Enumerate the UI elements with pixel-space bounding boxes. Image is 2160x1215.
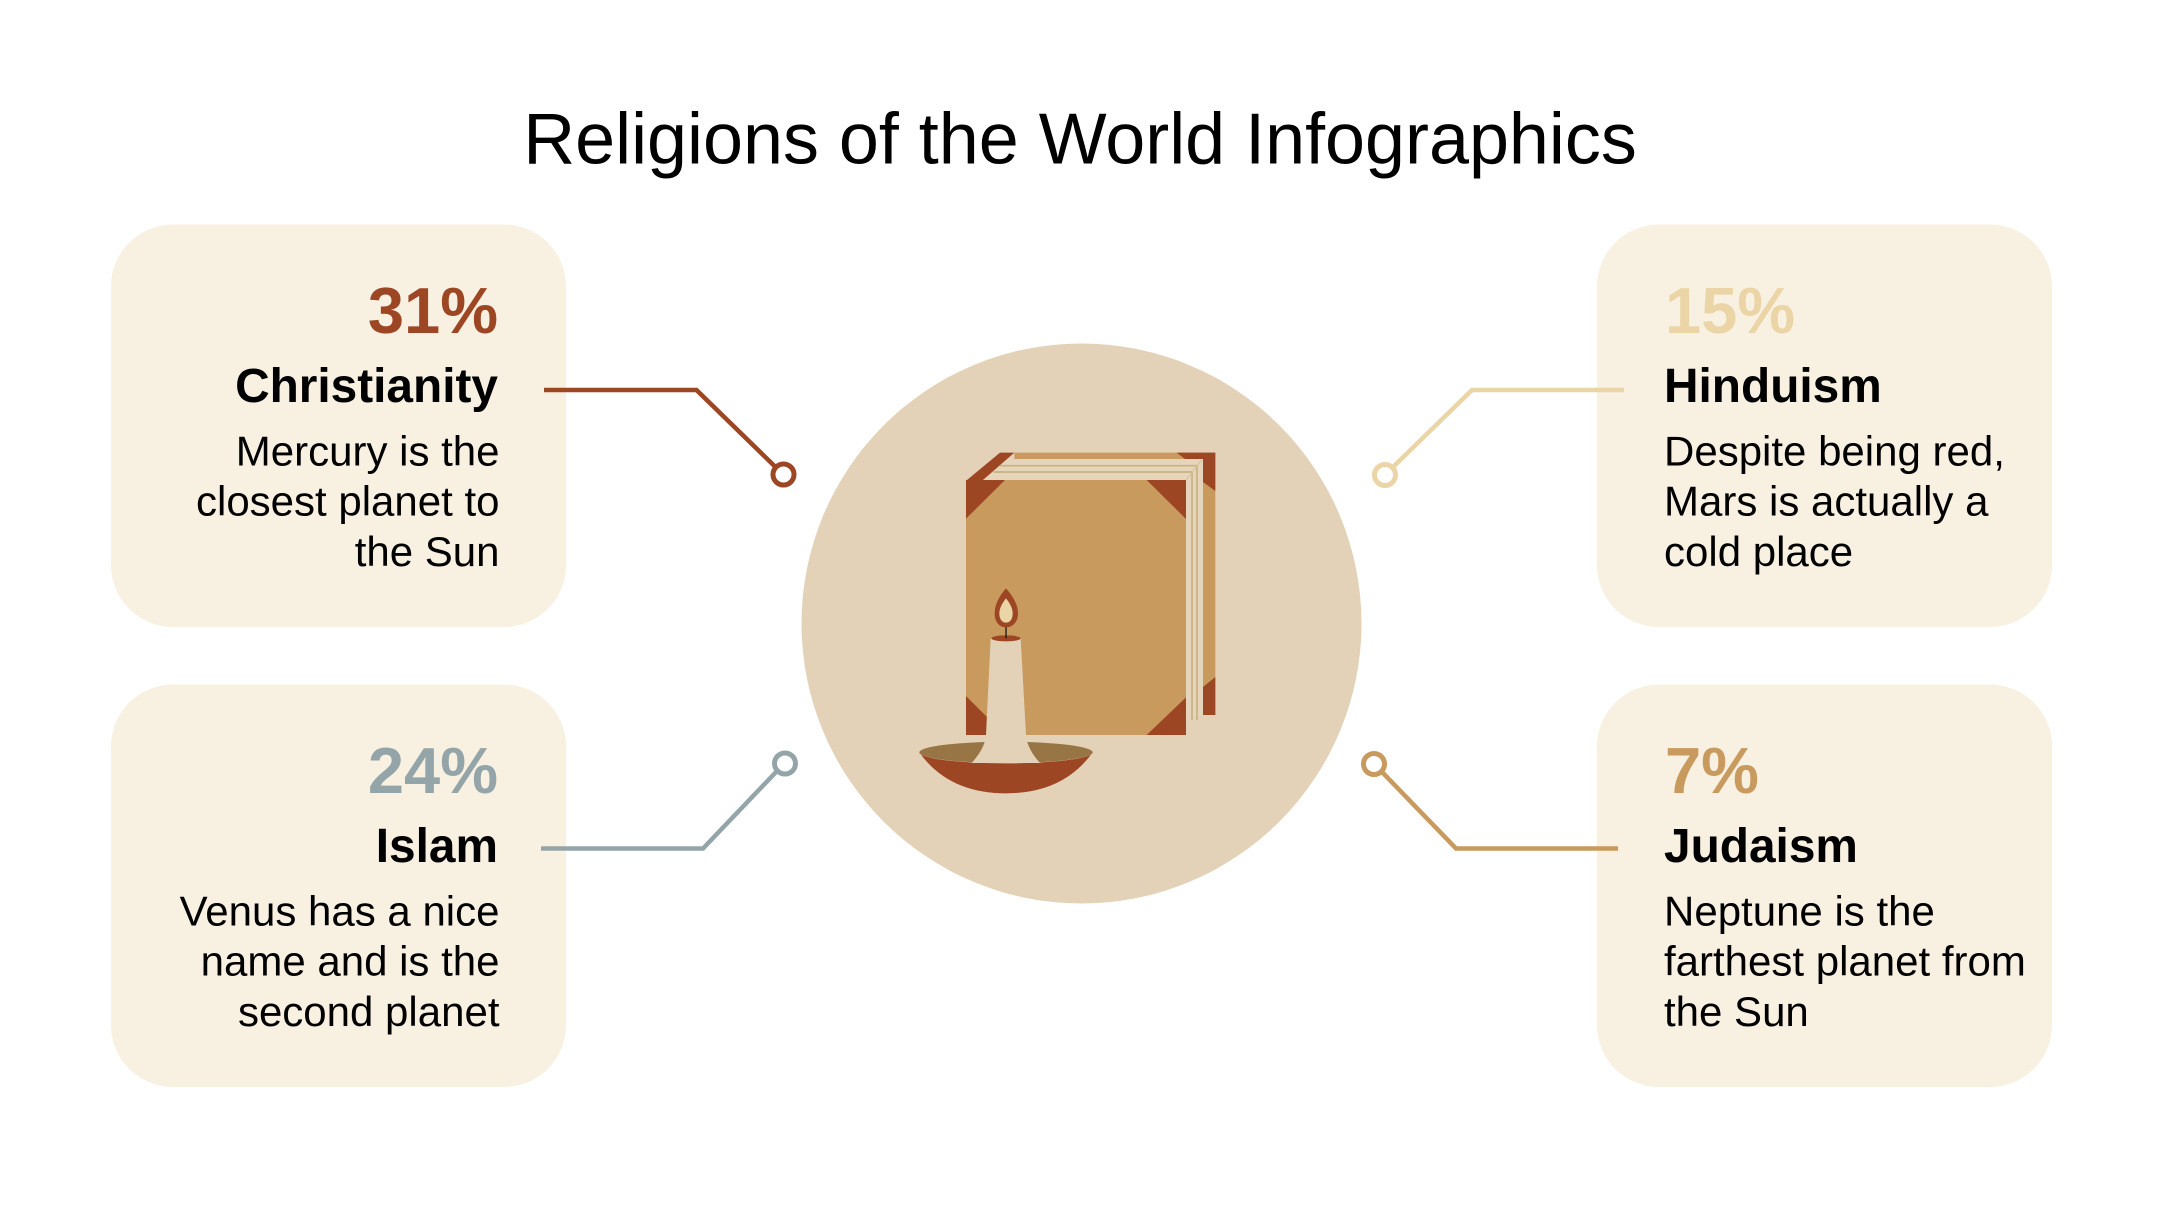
book back cover <box>1014 453 1215 715</box>
description: cold place <box>1664 528 1853 575</box>
description: closest planet to <box>196 478 500 524</box>
description: Venus has a nice <box>180 888 500 934</box>
connector: Christianity <box>544 390 794 485</box>
flame outer <box>995 588 1018 627</box>
panel background <box>111 224 566 627</box>
percentage: 31%: 31% <box>368 274 498 347</box>
panel background <box>111 684 566 1087</box>
description: Mars is actually a <box>1664 478 1989 524</box>
page corner folds <box>1186 460 1202 480</box>
title: Religions of the World Infographics <box>523 100 1637 180</box>
connector: Judaism <box>1364 754 1618 848</box>
candle body <box>972 638 1040 763</box>
connector: Hinduism <box>1374 390 1624 486</box>
heading: Hinduism: Hinduism <box>1664 360 1882 413</box>
description: the Sun <box>1664 988 1809 1035</box>
description: name and is the <box>201 938 500 984</box>
description: Neptune is the <box>1664 888 1935 934</box>
flame inner <box>999 598 1013 623</box>
back cover corners <box>967 453 1215 715</box>
panel: Christianity <box>111 224 566 627</box>
icon: candle <box>919 588 1093 793</box>
percentage: 15%: 15% <box>1665 274 1795 347</box>
heading: Islam: Islam <box>376 820 498 873</box>
panel: Islam <box>111 684 566 1087</box>
bowl front <box>919 752 1093 793</box>
central circle <box>802 344 1362 904</box>
candle top <box>991 635 1021 641</box>
description: Mercury is the <box>236 428 500 474</box>
connector: Islam <box>541 753 796 848</box>
bowl interior <box>919 742 1093 763</box>
page edge lines <box>993 466 1197 720</box>
heading: Christianity: Christianity <box>235 360 498 413</box>
panel background <box>1597 224 2052 627</box>
description: Despite being red, <box>1664 428 2005 474</box>
wick <box>1004 627 1008 638</box>
book front cover <box>966 480 1186 735</box>
icon: book and candle <box>919 453 1215 793</box>
description: the Sun <box>355 528 500 575</box>
panel: Hinduism <box>1597 224 2052 627</box>
panel: Judaism <box>1597 684 2052 1087</box>
icon: book <box>966 453 1215 735</box>
percentage: 7%: 7% <box>1665 734 1759 807</box>
heading: Judaism: Judaism <box>1664 820 1858 873</box>
book pages <box>983 459 1203 720</box>
description: second planet <box>238 988 500 1035</box>
description: farthest planet from <box>1664 938 2026 984</box>
front cover corners <box>966 480 1186 735</box>
panel background <box>1597 684 2052 1087</box>
percentage: 24%: 24% <box>368 734 498 807</box>
